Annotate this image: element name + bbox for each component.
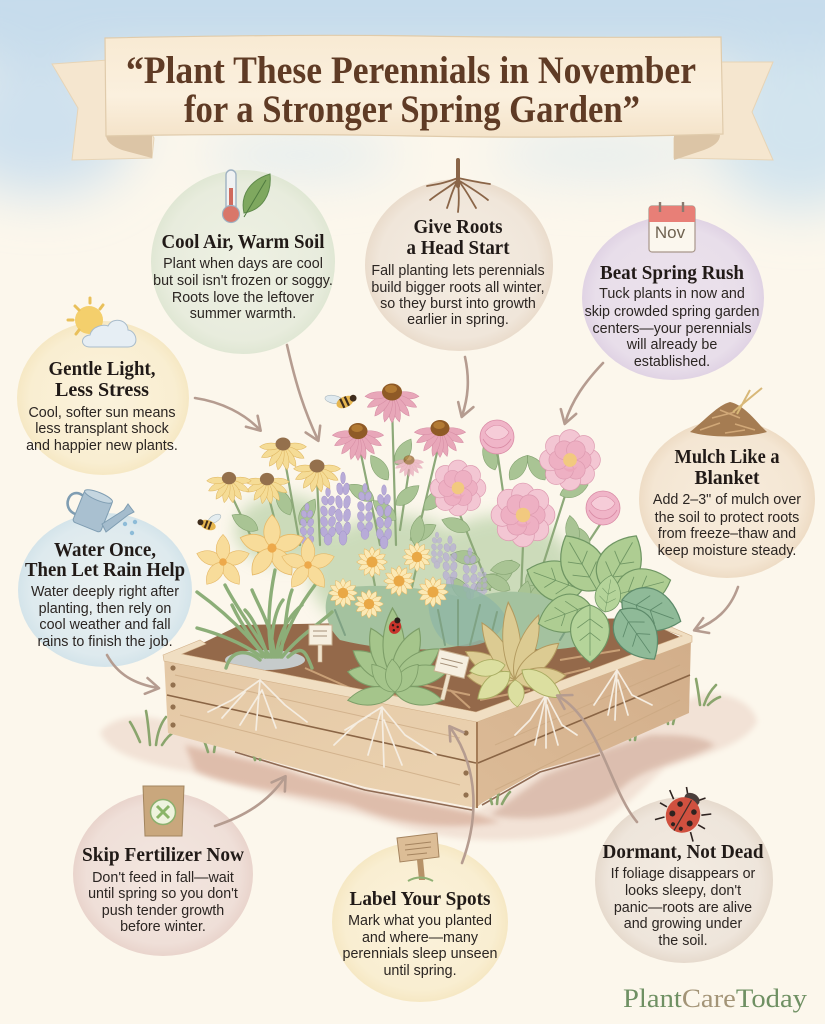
heading: Cool Air, Warm Soil: [162, 232, 325, 253]
body text: so they burst into growth: [380, 296, 536, 312]
body text: until spring.: [383, 963, 457, 979]
subheading: Then Let Rain Help: [25, 560, 185, 581]
icon: calendar: [649, 202, 695, 252]
heading: Gentle Light,: [48, 359, 156, 380]
body text: If foliage disappears or: [611, 866, 756, 882]
icon: thermometer and leaf: [222, 170, 270, 222]
body text: and where—many: [362, 930, 479, 946]
panel: skip fertilizer: [73, 786, 253, 956]
icon: calendar: Nov: [655, 223, 686, 242]
arrow: mulch to bed: [695, 587, 738, 630]
icon: watering can: [61, 483, 137, 535]
body text: push tender growth: [102, 903, 224, 919]
title ribbon banner: [52, 35, 773, 160]
ribbon folds: [106, 135, 720, 160]
left ribbon tail: [52, 60, 154, 160]
sky watercolor wash: [0, 0, 825, 210]
stems: [229, 405, 603, 640]
heading: Mulch Like a: [674, 447, 780, 468]
bee left: [196, 507, 224, 533]
body text: less transplant shock: [35, 421, 170, 437]
body text: Don't feed in fall—wait: [92, 870, 234, 886]
arrow: roots to plants: [462, 357, 468, 416]
icon: sun and cloud: [68, 298, 136, 347]
leaves behind flowers: [229, 436, 594, 641]
title text: “Plant These Perennials in November: [126, 49, 696, 92]
body text: build bigger roots all winter,: [371, 280, 545, 296]
body text: Plant when days are cool: [163, 256, 323, 272]
grass blades: [197, 570, 332, 668]
icon: fertilizer bag: [143, 786, 184, 836]
bee top: [322, 383, 359, 415]
subheading: Less Stress: [55, 380, 149, 401]
centre green plant with ladybug: [346, 608, 450, 709]
heading: Give Roots: [414, 217, 503, 238]
body text: panic—roots are alive: [614, 900, 752, 916]
body text: keep moisture steady.: [658, 543, 796, 559]
nails: [170, 665, 469, 798]
heading: Beat Spring Rush: [600, 263, 744, 284]
roots: [208, 670, 652, 767]
plant marker two: [428, 649, 469, 704]
subheading: a Head Start: [406, 238, 510, 259]
bees: [196, 383, 359, 533]
ladybug: [387, 616, 404, 636]
plank lines: [167, 675, 690, 763]
ground soil wash: [100, 679, 757, 840]
icon: wooden sign: [397, 833, 439, 881]
peonies: [430, 420, 620, 547]
mulch: [180, 618, 682, 714]
lavender: [299, 472, 488, 600]
low foliage covering back of bed: [326, 584, 600, 649]
hosta plant: [520, 525, 688, 671]
right face: [476, 638, 691, 808]
body text: the soil to protect roots: [655, 510, 799, 526]
body text: cool weather and fall: [39, 617, 171, 633]
body text: summer warmth.: [190, 306, 296, 322]
body text: Add 2–3" of mulch over: [653, 492, 801, 508]
panel: water once: [18, 483, 192, 667]
ribbon body: [105, 35, 723, 137]
body text: Water deeply right after: [31, 584, 179, 600]
left face: [164, 657, 476, 808]
body text: rains to finish the job.: [37, 634, 173, 650]
body text: perennials sleep unseen: [342, 946, 498, 962]
body text: looks sleepy, don't: [625, 883, 741, 899]
body text: will already be: [626, 337, 717, 353]
body text: centers—your perennials: [593, 321, 751, 337]
body text: Roots love the leftover: [172, 290, 314, 306]
plant marker one: [309, 625, 332, 662]
body text: the soil.: [658, 933, 708, 949]
water puddle: [225, 650, 305, 670]
foliage mass: [235, 495, 575, 635]
top rim: [163, 624, 692, 722]
panel: give roots a head start: [365, 160, 553, 351]
golden tan plant: [461, 602, 567, 708]
panel: cool air warm soil: [151, 170, 335, 354]
coneflowers: [332, 384, 466, 477]
panel: gentle light less stress: [17, 298, 189, 475]
logo: PlantCareToday: PlantCareToday: [623, 984, 807, 1013]
back plants stems and foliage: [229, 405, 603, 641]
body text: established.: [634, 354, 710, 370]
body text: Cool, softer sun means: [28, 405, 176, 421]
body text: Tuck plants in now and: [599, 286, 745, 302]
lily plant: [195, 515, 336, 668]
daisies: [328, 542, 448, 619]
right ribbon tail: [674, 62, 773, 160]
arrow: gentle light to plants: [195, 398, 260, 430]
body text: earlier in spring.: [407, 312, 509, 328]
subheading: Blanket: [694, 468, 760, 489]
icon: ladybug: [651, 779, 719, 844]
panel: dormant not dead: [595, 779, 773, 963]
body text: from freeze–thaw and: [658, 526, 796, 542]
icon: roots: [427, 160, 490, 212]
body text: Mark what you planted: [348, 913, 492, 929]
arrow: dormant to roots: [558, 696, 637, 822]
body text: before winter.: [120, 919, 206, 935]
body text: skip crowded spring garden: [585, 304, 759, 320]
arrow: water to bed: [107, 655, 158, 688]
body text: until spring so you don't: [88, 886, 238, 902]
panel: beat spring rush: [582, 202, 764, 380]
arrow: cool air to plants: [287, 345, 318, 440]
arrow: spring rush to plants: [565, 363, 603, 423]
body text: and happier new plants.: [26, 438, 178, 454]
heading: Label Your Spots: [350, 889, 491, 910]
body text: but soil isn't frozen or soggy.: [153, 273, 333, 289]
wood grain: [175, 665, 680, 790]
body text: and growing under: [624, 916, 742, 932]
title text: for a Stronger Spring Garden”: [184, 88, 640, 131]
panel: mulch like a blanket: [639, 388, 815, 578]
body text: Fall planting lets perennials: [371, 263, 545, 279]
icon: mulch pile: [690, 388, 767, 436]
yellow rudbeckia flowers: [207, 438, 341, 504]
heading: Dormant, Not Dead: [602, 842, 764, 863]
arrows: [107, 345, 738, 863]
heading: Water Once,: [54, 540, 156, 561]
raised wooden garden bed: [163, 618, 692, 808]
heading: Skip Fertilizer Now: [82, 845, 244, 866]
arrow: fertilizer to soil: [215, 777, 285, 826]
panel: label your spots: [332, 833, 508, 1002]
body text: planting, then rely on: [39, 601, 171, 617]
arrow: label to marker: [450, 727, 473, 863]
